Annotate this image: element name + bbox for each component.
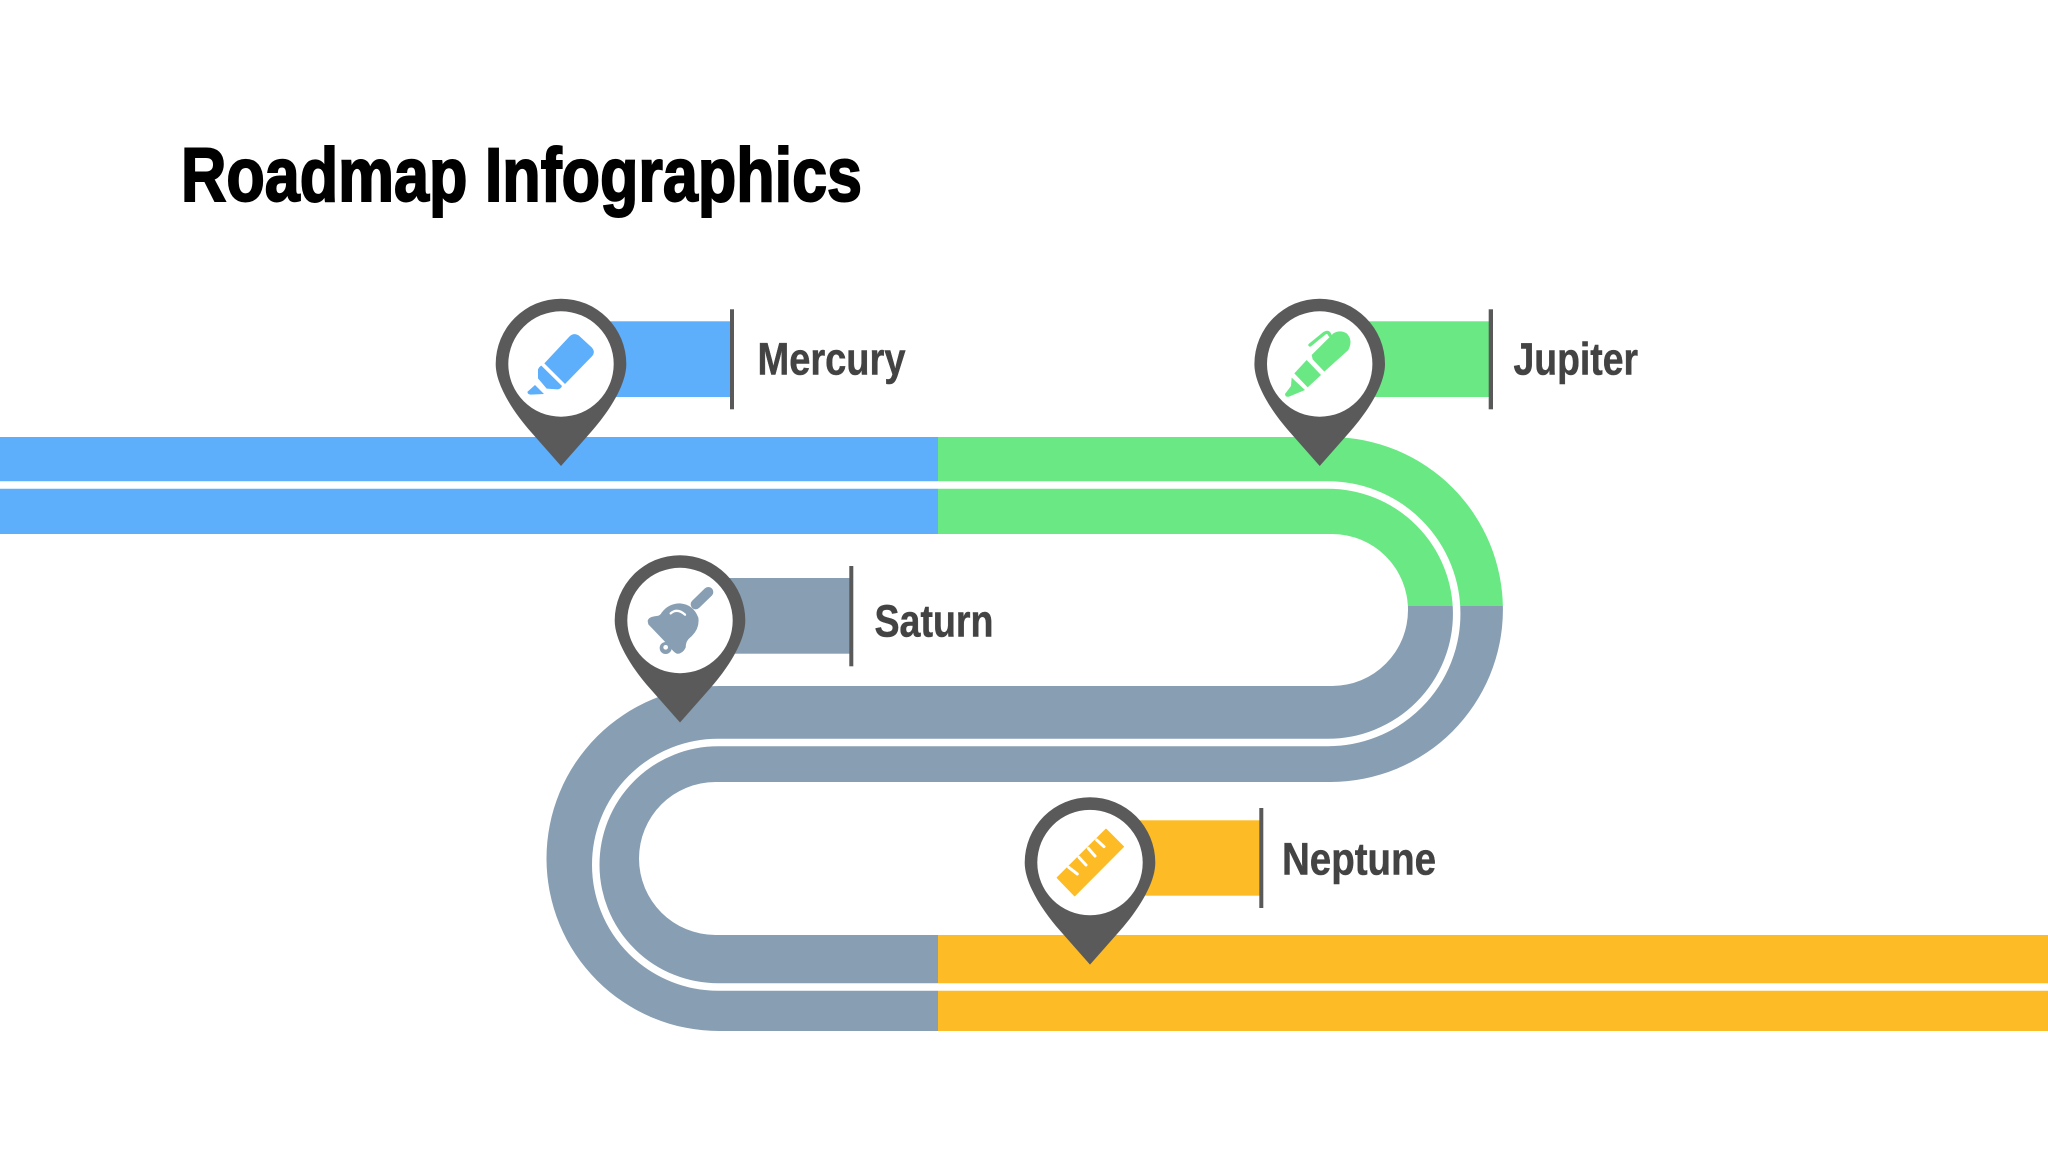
milestone: Mercury <box>496 299 906 466</box>
title: Roadmap Infographics <box>181 133 862 218</box>
infographic canvas <box>0 145 2048 1031</box>
pin: Saturn <box>615 555 745 722</box>
milestone: Jupiter <box>1254 299 1638 466</box>
road segment: orange <box>938 935 2048 1031</box>
label: Neptune: Neptune <box>1282 833 1436 884</box>
divider bar: Mercury <box>730 309 734 409</box>
flag: Saturn <box>720 578 850 654</box>
road segment: green <box>938 437 1503 606</box>
flag: Mercury <box>600 321 730 397</box>
label: Jupiter: Jupiter <box>1514 333 1638 384</box>
road segment: slate <box>546 606 1503 1031</box>
icon: highlighter <box>527 334 594 395</box>
pin: Neptune <box>1025 797 1155 965</box>
road: winding route <box>0 437 2048 1031</box>
icon: ruler <box>1057 829 1123 896</box>
milestone: Neptune <box>1025 797 1436 965</box>
divider bar: Saturn <box>849 566 853 666</box>
divider bar: Jupiter <box>1489 309 1493 409</box>
milestone: Saturn <box>615 555 994 722</box>
label: Saturn: Saturn <box>874 596 994 647</box>
pin: Jupiter <box>1254 299 1385 466</box>
flag: Neptune <box>1130 820 1260 896</box>
icon: pen <box>1285 331 1350 397</box>
road segment: blue <box>0 437 938 534</box>
road centre line <box>0 485 2048 987</box>
flag: Jupiter <box>1360 321 1489 397</box>
pin: Mercury <box>496 299 626 466</box>
icon: bell <box>648 592 708 654</box>
divider bar: Neptune <box>1259 808 1263 908</box>
label: Mercury: Mercury <box>758 333 906 384</box>
